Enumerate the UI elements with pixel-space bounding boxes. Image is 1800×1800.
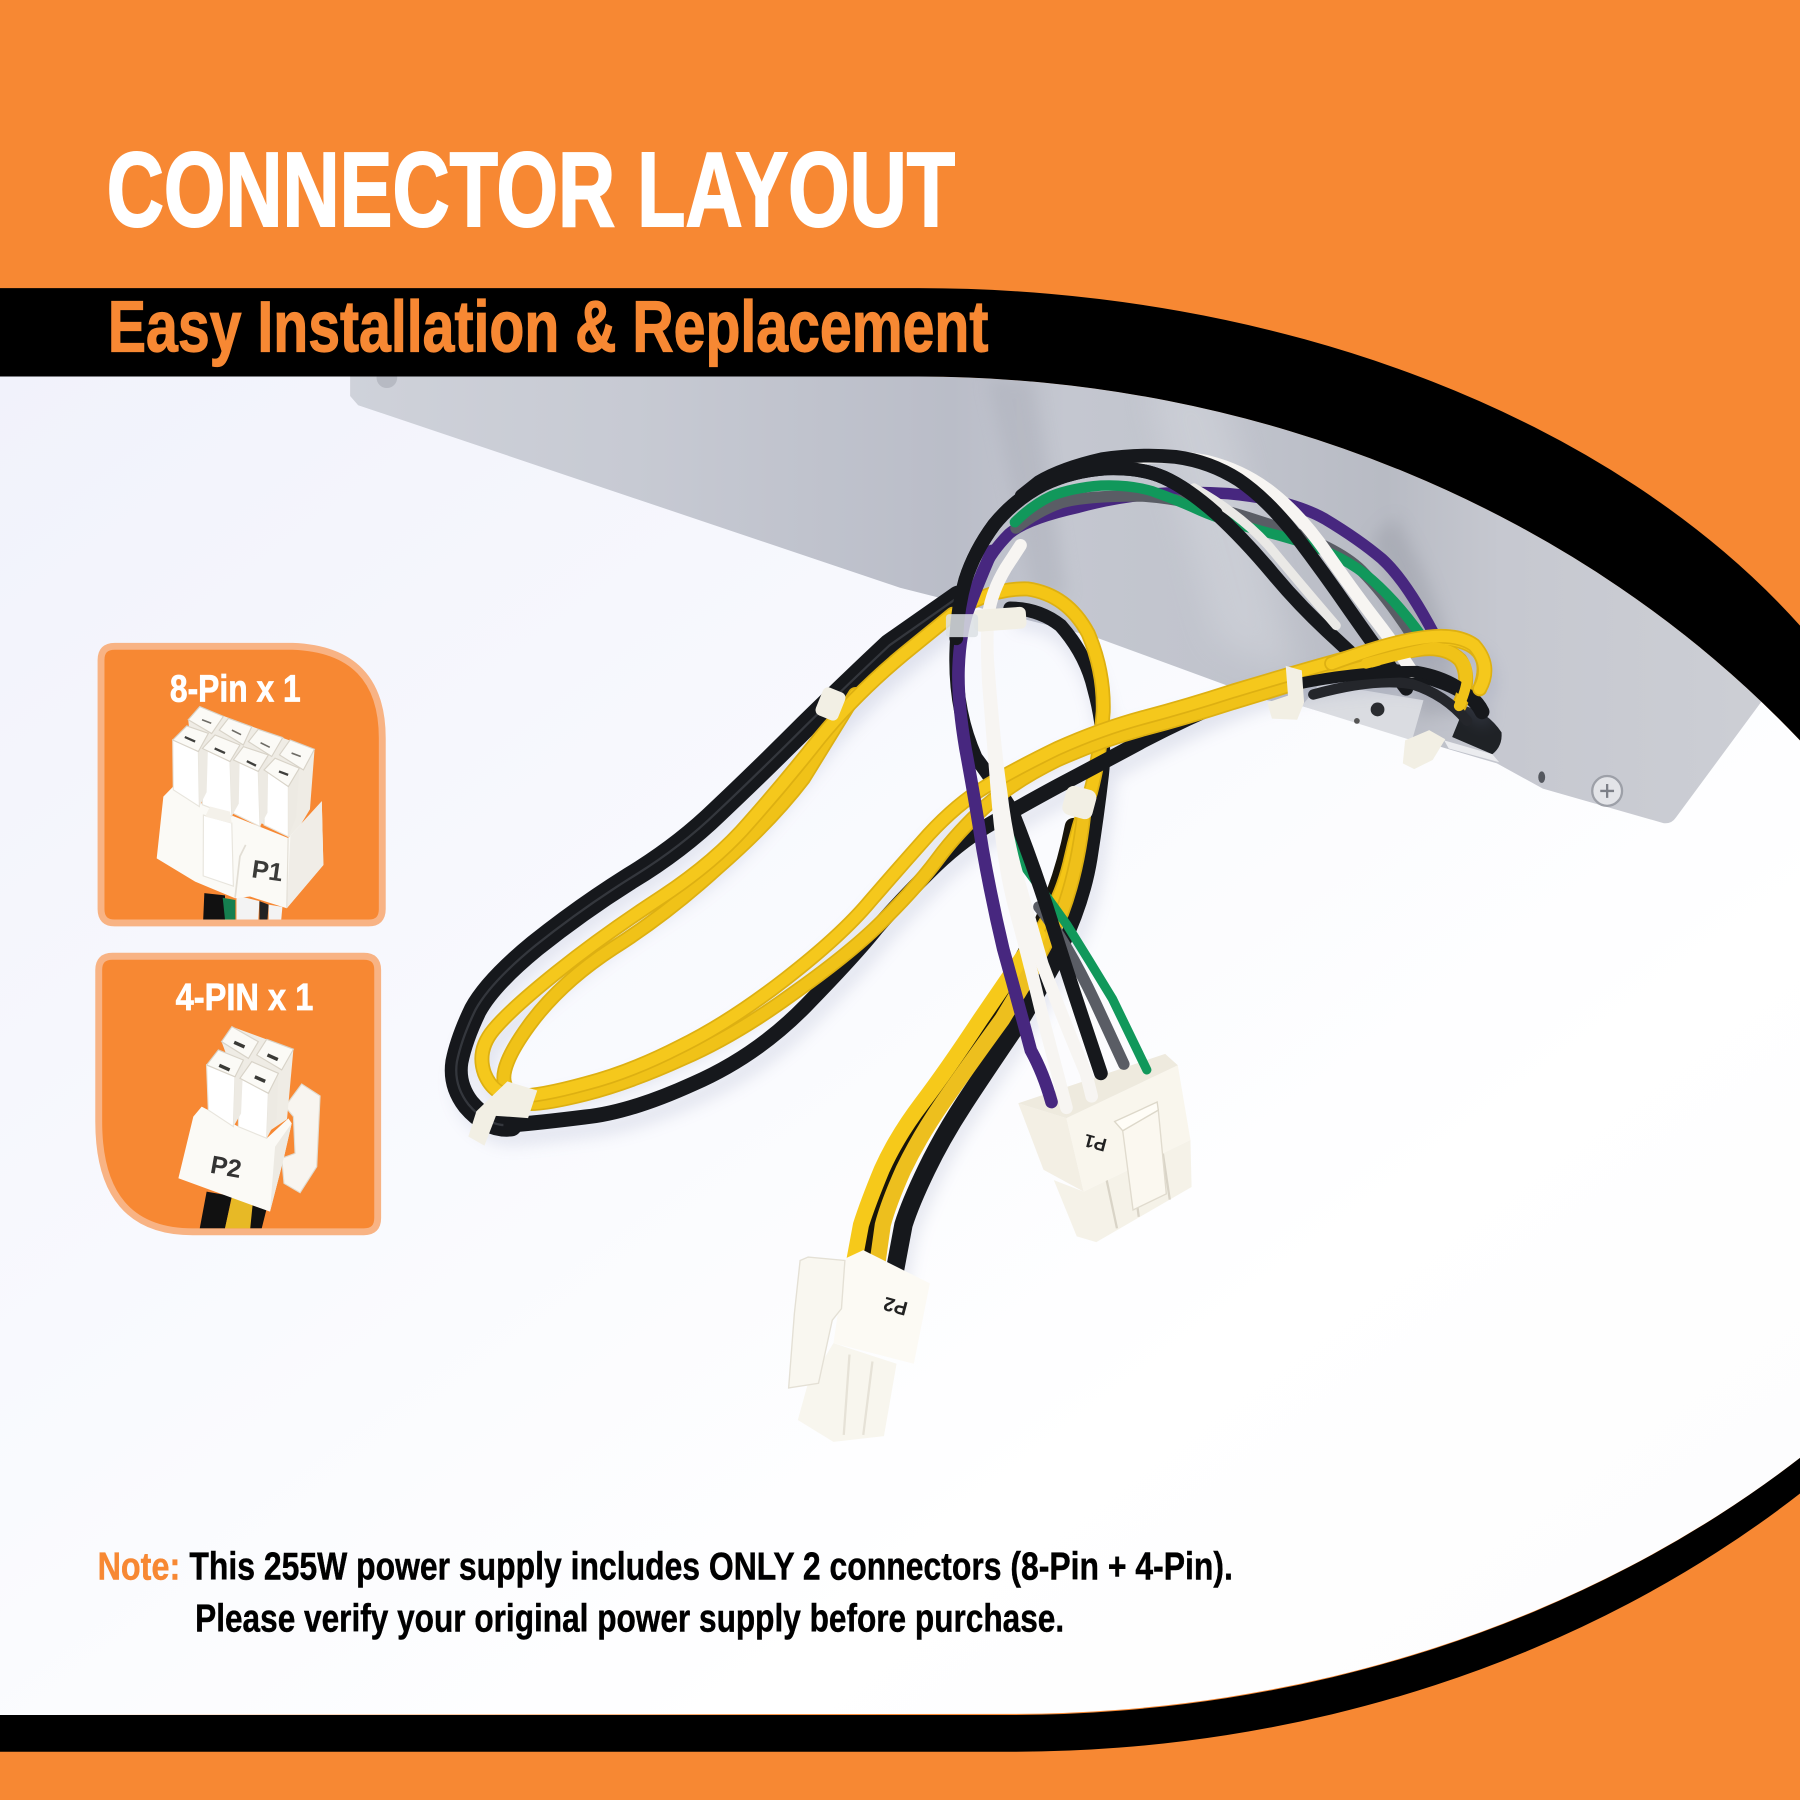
- cable tie: left arm: [816, 687, 846, 720]
- title: CONNECTOR LAYOUT: [107, 131, 955, 249]
- panel heading: 8-pin: 8-Pin x 1: [170, 668, 301, 710]
- note label: Note:: [98, 1546, 180, 1589]
- icon: 4-pin connector: [178, 1027, 320, 1228]
- cable tie: lower arc: [1062, 786, 1096, 820]
- label: P1 on 8-pin icon: P1: [250, 855, 285, 887]
- wires: yellow and black loop at casing exit: [1302, 636, 1485, 721]
- connector: P1 eight-pin plug on the cable: [1018, 1054, 1192, 1242]
- black header band: [0, 288, 1800, 740]
- note line one: This 255W power supply includes ONLY 2 connectors (8-Pin + 4-Pin).: [189, 1546, 1233, 1589]
- note line two: Please verify your original power supply before purchase.: [195, 1597, 1064, 1640]
- wires: purple-grey-green rear section: [956, 468, 1434, 1073]
- cable tie: connector end: [1403, 730, 1445, 769]
- icon: 8-pin connector: [157, 707, 323, 920]
- label: P2 on 4-pin icon: P2: [208, 1151, 244, 1184]
- soft wire shadows: [461, 608, 1489, 1291]
- panel: 4-pin connector: [99, 956, 378, 1232]
- note text: [98, 1546, 1233, 1640]
- cable tie: top junction: [946, 607, 1027, 637]
- panel heading: 4-pin: 4-PIN x 1: [176, 977, 313, 1019]
- wires: yellow and black P2 lead: [852, 589, 1103, 1280]
- black footer band: [0, 1458, 1800, 1752]
- wires: yellow and black long loop: [456, 597, 1484, 1125]
- cable tie: loop end: [468, 1081, 537, 1146]
- photo backdrop: [0, 367, 1800, 1722]
- cable tie: casing exit: [1267, 666, 1304, 720]
- panel: product photo: [0, 367, 1800, 1722]
- subtitle: Easy Installation & Replacement: [108, 287, 988, 367]
- power supply metal casing: [350, 367, 1800, 823]
- cable ties: [468, 607, 1445, 1146]
- label: P2: P2: [881, 1292, 910, 1319]
- wires: purple and white P1 lead: [956, 456, 1412, 1108]
- connector: P2 four-pin plug on the cable: [789, 1250, 930, 1442]
- panel: 8-pin connector: [101, 646, 382, 923]
- label: P1: P1: [1082, 1130, 1109, 1156]
